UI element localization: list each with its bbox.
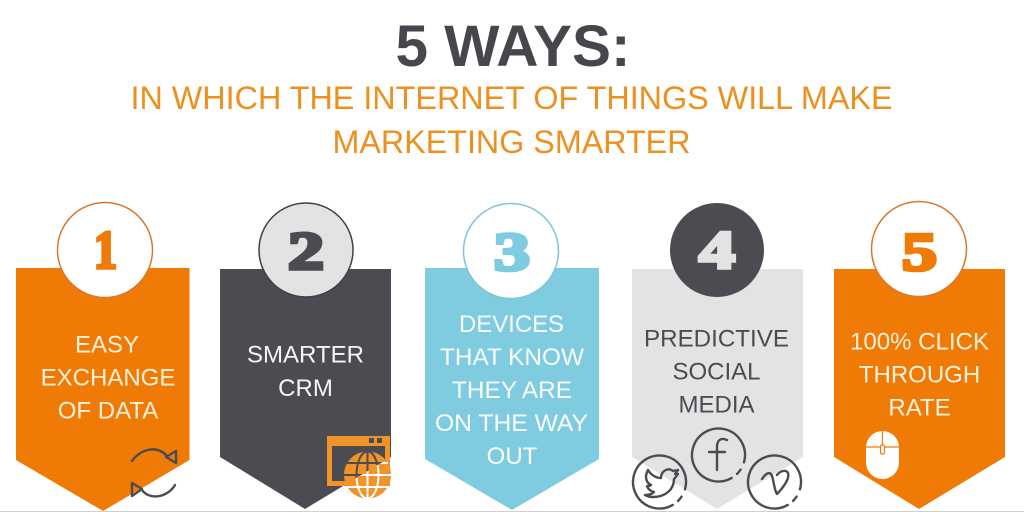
icon: facebook circle — [682, 419, 755, 491]
label: predictive social media — [644, 326, 789, 418]
subtitle: MARKETING SMARTER — [332, 124, 690, 160]
icon: twitter circle — [623, 446, 696, 512]
icon: vimeo circle — [738, 446, 811, 512]
number badge 3 — [464, 204, 558, 298]
number badge 2 — [259, 203, 353, 297]
number badge 3: 3 — [494, 222, 530, 282]
label: 100% click through rate: 100% CLICK — [850, 328, 989, 356]
icon: browser window with globe — [327, 436, 391, 498]
label: devices that know they are on the way out: DEVICES — [459, 311, 564, 338]
label: easy exchange of data: EXCHANGE — [41, 364, 175, 392]
label: smarter crm — [247, 342, 364, 402]
label: devices that know they are on the way out: ON THE WAY — [435, 410, 588, 437]
icon: refresh arrows — [132, 449, 176, 496]
number badge 2: 2 — [288, 221, 324, 281]
number badge 5: 5 — [902, 222, 937, 282]
label: devices that know they are on the way out — [435, 311, 588, 470]
label: predictive social media: SOCIAL — [672, 358, 761, 386]
number badge 1 — [58, 202, 152, 298]
panel: step 3 devices that know — [425, 204, 599, 510]
label: 100% click through rate: THROUGH — [859, 362, 980, 388]
label: 100% click through rate — [850, 328, 989, 422]
number badge 4 — [670, 203, 764, 297]
panel: step 4 predictive social media — [623, 203, 811, 512]
label: easy exchange of data: EASY — [75, 332, 139, 358]
label: smarter crm: SMARTER — [247, 342, 364, 368]
label: devices that know they are on the way out: THEY ARE — [452, 377, 572, 404]
panel: step 2 smarter crm — [220, 203, 391, 509]
number badge 1: 1 — [94, 220, 117, 280]
panel: step 5 click through rate — [834, 202, 1005, 509]
label: 100% click through rate: RATE — [888, 394, 951, 422]
subtitle — [130, 80, 893, 160]
number badge 5 — [872, 202, 966, 296]
label: devices that know they are on the way out: THAT KNOW — [440, 344, 584, 371]
label: predictive social media: PREDICTIVE — [644, 326, 789, 352]
label: predictive social media: MEDIA — [678, 392, 755, 418]
label: easy exchange of data: OF DATA — [58, 398, 158, 424]
title: 5 WAYS: — [396, 14, 630, 79]
label: smarter crm: CRM — [278, 375, 333, 402]
icon: computer mouse — [866, 431, 899, 479]
subtitle: IN WHICH THE INTERNET OF THINGS WILL MAKE — [130, 80, 893, 116]
panel: step 1 easy exchange of data — [16, 202, 190, 511]
label: easy exchange of data — [41, 332, 175, 424]
label: devices that know they are on the way out: OUT — [487, 443, 538, 470]
number badge 4: 4 — [699, 220, 735, 280]
